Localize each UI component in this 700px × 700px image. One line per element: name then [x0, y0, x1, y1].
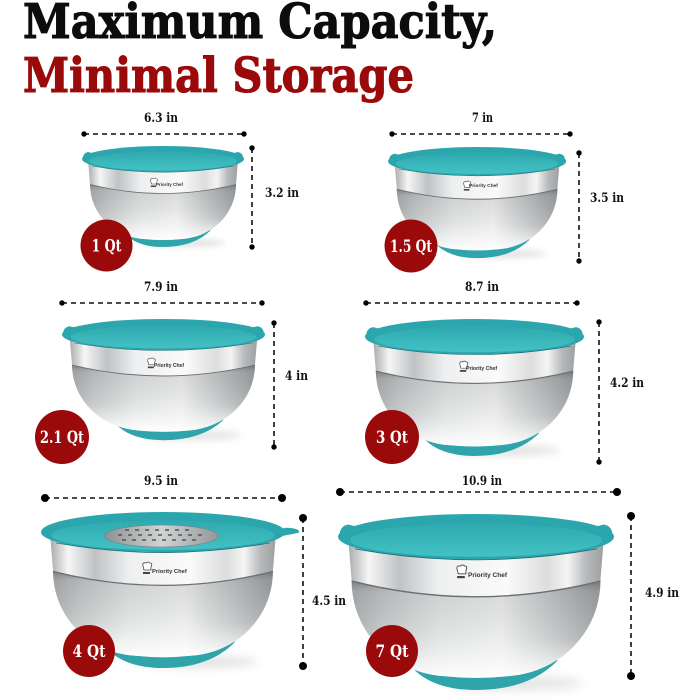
title — [23, 0, 497, 104]
width dimension: 6.3 in — [144, 111, 178, 126]
height dimension — [596, 319, 644, 465]
bowl photo: 3 Qt — [365, 319, 584, 456]
height dimension: 4.2 in — [610, 376, 644, 391]
capacity badge — [35, 410, 89, 464]
title: Minimal Storage — [23, 48, 414, 104]
width dimension — [59, 280, 265, 306]
brand label: Priority Chef — [468, 572, 508, 579]
height dimension — [627, 512, 679, 680]
width dimension: 9.5 in — [144, 474, 178, 489]
brand label: Priority Chef — [152, 569, 187, 575]
height dimension — [299, 514, 346, 670]
brand label: Priority Chef — [469, 183, 498, 189]
bowl photo: 2.1 Qt — [62, 319, 265, 440]
width dimension: 10.9 in — [462, 474, 502, 489]
brand label: Priority Chef — [466, 366, 497, 372]
capacity badge — [365, 410, 419, 464]
brand label — [457, 565, 508, 579]
brand label — [151, 178, 184, 187]
bowl photo: 4 Qt — [41, 512, 285, 668]
height dimension — [249, 145, 299, 250]
height dimension: 3.2 in — [265, 186, 299, 201]
capacity badge — [384, 220, 438, 272]
capacity badge: 3 Qt — [376, 428, 408, 448]
capacity badge: 7 Qt — [376, 642, 409, 662]
capacity badge: 4 Qt — [72, 642, 106, 662]
capacity badge: 1 Qt — [92, 236, 122, 256]
width dimension: 8.7 in — [465, 280, 499, 295]
brand label — [143, 562, 187, 575]
panel: 1 Qt bowl — [80, 111, 299, 272]
panel: 3 Qt bowl — [363, 280, 644, 465]
bowl photo: 7 Qt — [338, 514, 614, 690]
grater insert — [104, 525, 218, 547]
width dimension — [389, 111, 573, 137]
height dimension — [576, 150, 624, 264]
brand label — [148, 358, 184, 369]
panel: 1.5 Qt bowl — [384, 111, 624, 272]
capacity badge — [63, 625, 115, 677]
panel: 7 Qt bowl — [336, 474, 679, 690]
height dimension — [271, 320, 308, 450]
width dimension: 7 in — [472, 111, 493, 126]
width dimension — [336, 474, 621, 496]
height dimension: 4 in — [285, 369, 308, 384]
bowl photo: 1.5 Qt — [388, 147, 566, 258]
width dimension — [81, 111, 247, 137]
width dimension: 7.9 in — [144, 280, 178, 295]
height dimension: 4.9 in — [645, 586, 679, 601]
capacity badge — [366, 625, 418, 677]
lid tab — [278, 528, 299, 536]
brand label — [460, 361, 497, 372]
panel: 4 Qt bowl — [41, 474, 346, 677]
capacity badge — [80, 220, 132, 272]
brand label: Priority Chef — [156, 182, 184, 187]
brand label: Priority Chef — [154, 363, 184, 369]
height dimension: 3.5 in — [590, 191, 624, 206]
width dimension — [363, 280, 580, 306]
width dimension — [41, 474, 286, 502]
bowl photo: 1 Qt — [82, 146, 244, 247]
capacity badge: 2.1 Qt — [40, 428, 84, 448]
height dimension: 4.5 in — [312, 594, 346, 609]
panel: 2.1 Qt bowl — [35, 280, 308, 464]
capacity badge: 1.5 Qt — [390, 237, 432, 257]
brand label — [464, 181, 498, 191]
